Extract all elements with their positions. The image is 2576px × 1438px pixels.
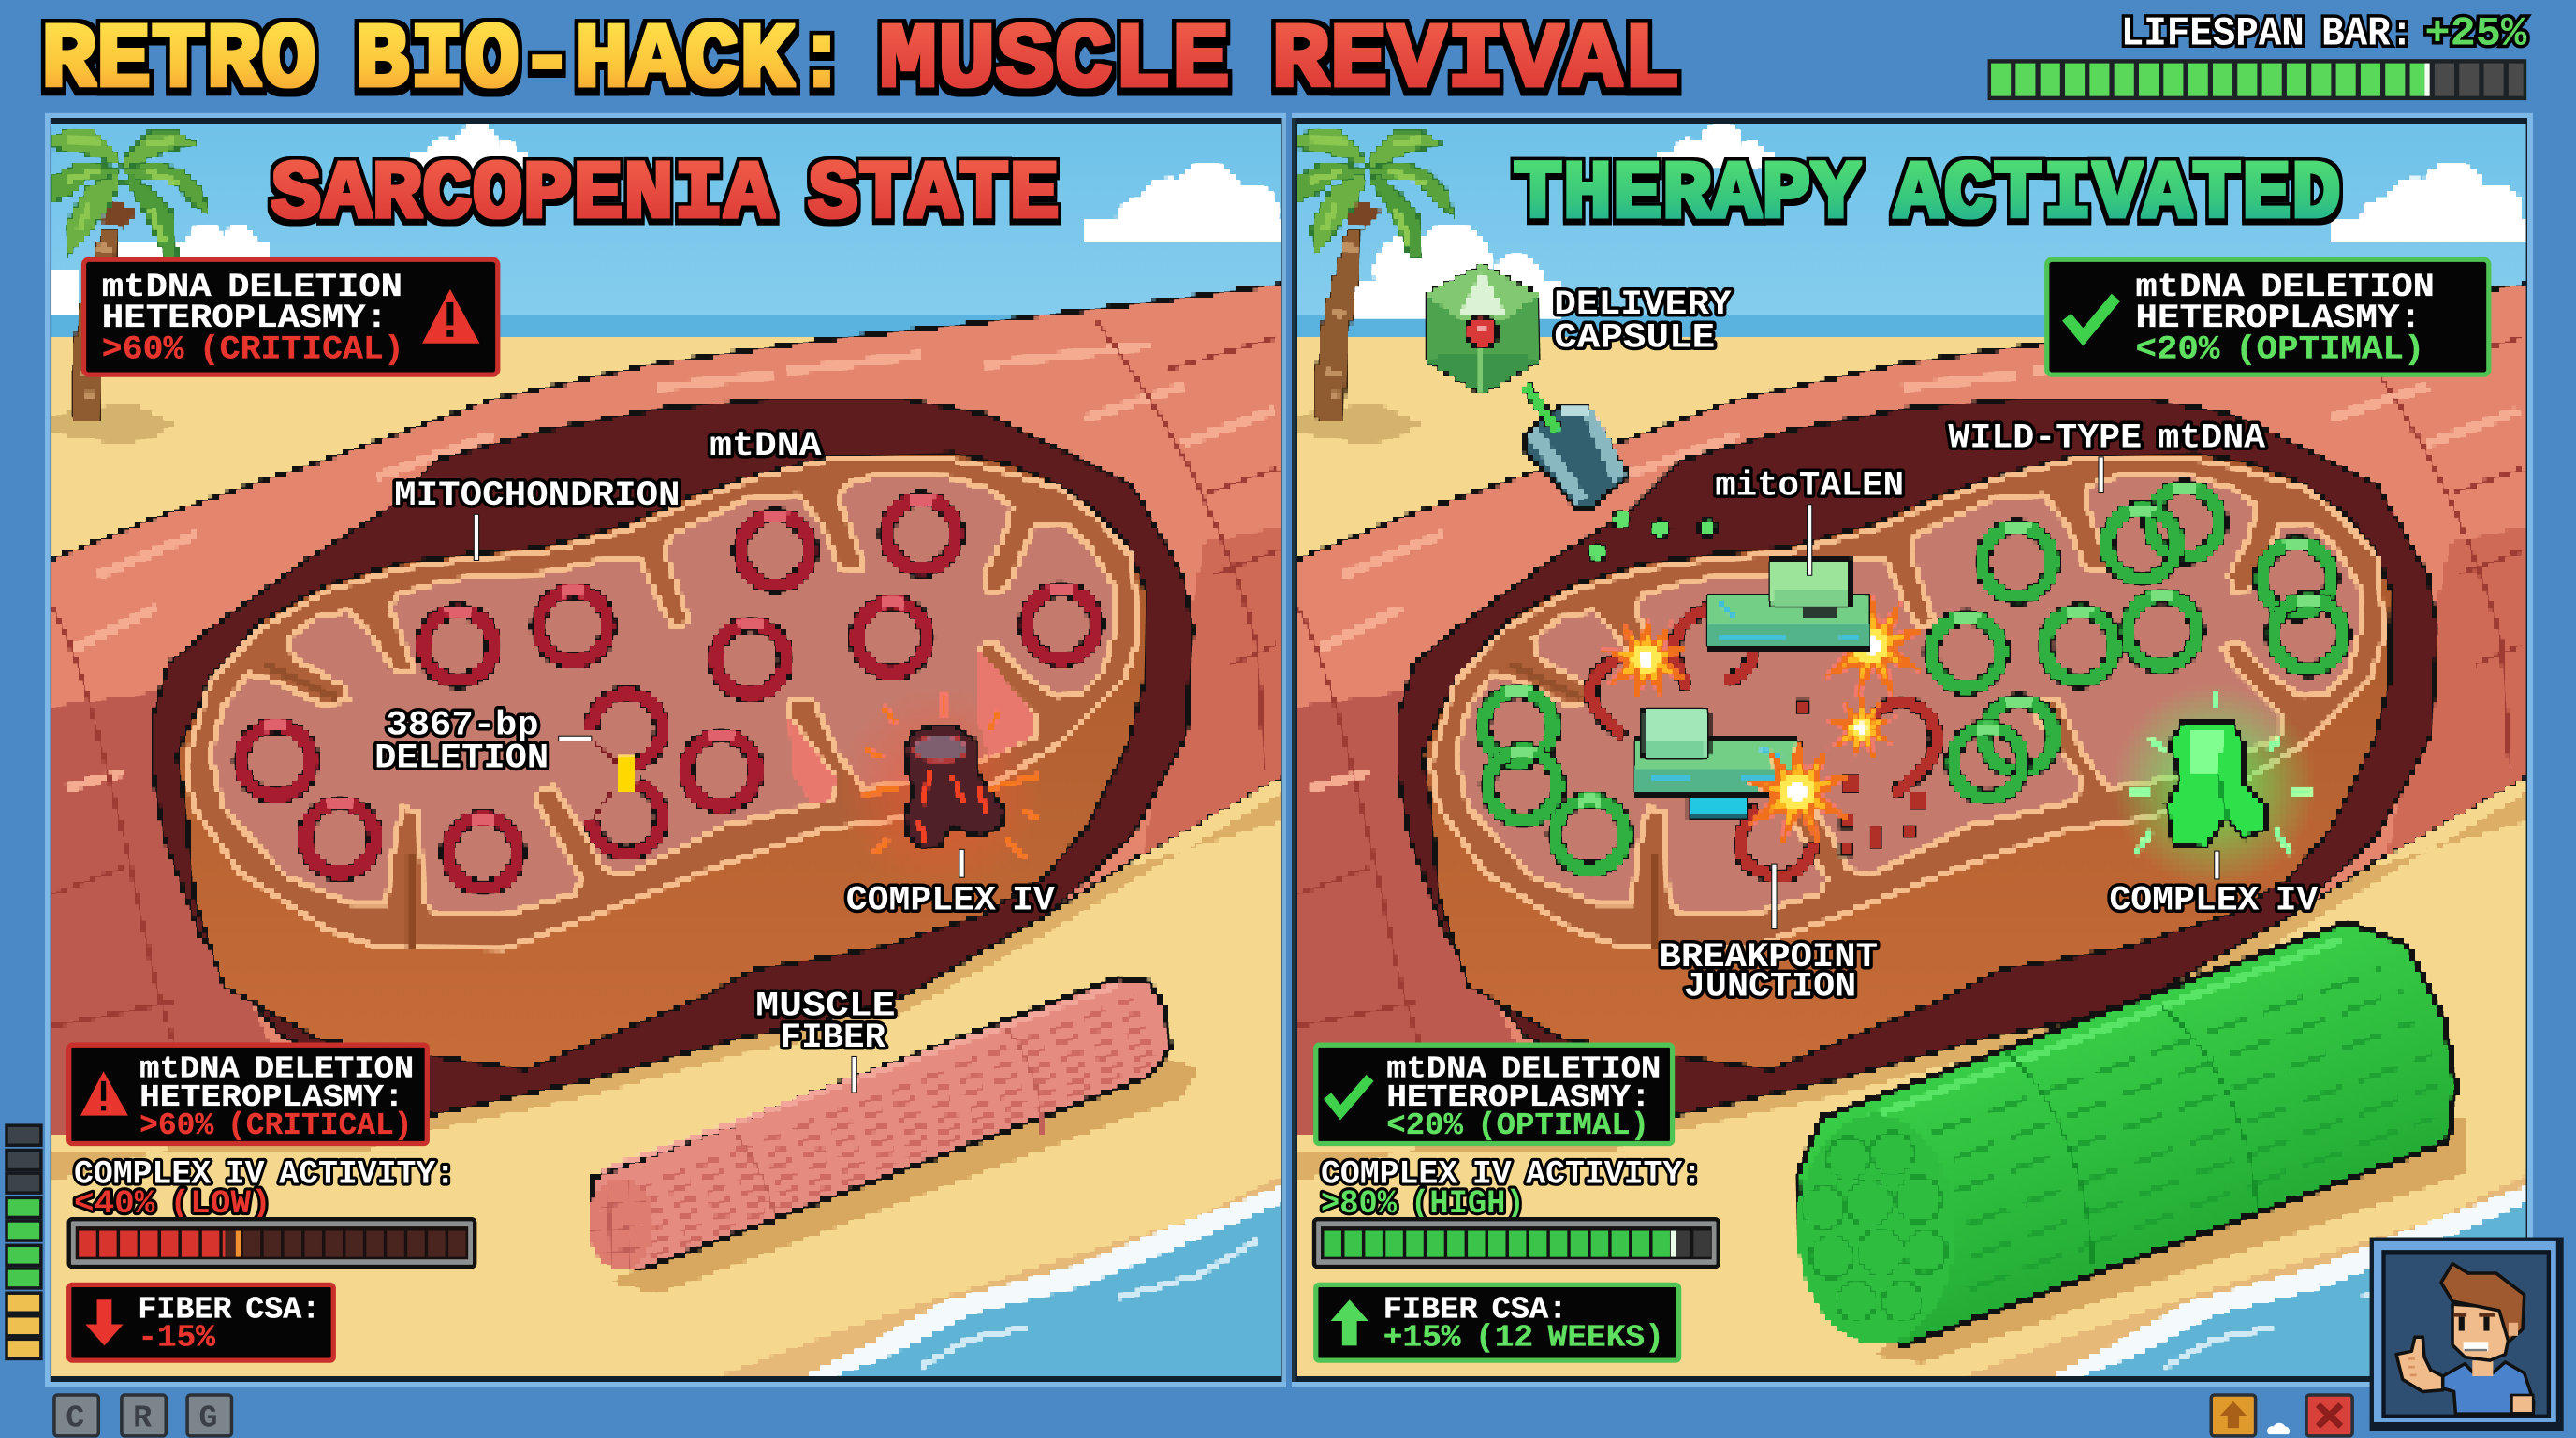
readout: complex IV activity high: COMPLEX IV ACTIVITY:	[1321, 1156, 1702, 1194]
readout: complex IV activity high	[1314, 1156, 1719, 1267]
icon: character ear, eyes and grin	[2453, 1313, 2518, 1351]
label: breakpoint junction	[1660, 864, 1878, 1007]
bottom left menu buttons: C	[66, 1401, 84, 1436]
label: mitoTALEN: mitoTALEN	[1715, 466, 1904, 506]
main title	[41, 8, 1680, 113]
readout: heteroplasmy optimal: mtDNA DELETION	[1386, 1051, 1661, 1087]
panel heading: sarcopenia state: SARCOPENIA STATE	[271, 150, 1060, 242]
bottom left menu buttons: G	[198, 1401, 217, 1436]
callout: heteroplasmy optimal	[2047, 259, 2489, 374]
delivery capsule	[1426, 265, 1540, 393]
readout: heteroplasmy optimal: <20% (OPTIMAL)	[1386, 1108, 1649, 1144]
label: muscle fiber: MUSCLE	[755, 988, 895, 1027]
callout: heteroplasmy optimal: mtDNA DELETION	[2135, 269, 2435, 306]
deleted mtDNA with breakpoint	[592, 694, 662, 853]
label: complex IV: COMPLEX IV	[846, 881, 1056, 920]
panel: sarcopenia state	[46, 115, 1286, 1388]
label: mitochondrion: MITOCHONDRION	[394, 477, 681, 516]
explosions	[1600, 590, 1927, 761]
readout: heteroplasmy critical: HETEROPLASMY:	[139, 1080, 404, 1116]
icon: character hair	[2441, 1264, 2525, 1342]
label: muscle fiber: FIBER	[781, 1019, 886, 1058]
readout: heteroplasmy optimal	[1316, 1045, 1673, 1144]
mitochondrion	[1398, 399, 2437, 1114]
lifespan bar	[1988, 59, 2526, 100]
main title: RETRO BIO-HACK:	[41, 8, 849, 113]
big muscle fiber regenerated	[1797, 922, 2464, 1364]
clouds	[1347, 124, 2526, 317]
label: breakpoint junction: JUNCTION	[1684, 968, 1856, 1007]
icon: character face	[2452, 1304, 2509, 1360]
palm tree	[52, 128, 209, 444]
muscle tissue band	[1295, 285, 2526, 1183]
bottom right buttons	[2211, 1395, 2352, 1436]
callout: heteroplasmy optimal: <20% (OPTIMAL)	[2135, 331, 2424, 369]
lifespan bar label: +25%	[2424, 10, 2527, 57]
readout: fiber CSA down: FIBER CSA:	[138, 1293, 320, 1328]
panel: therapy activated	[1291, 115, 2531, 1388]
character portrait	[2370, 1238, 2564, 1431]
label: 3867-bp deletion	[374, 706, 592, 779]
readout: complex IV activity low	[69, 1156, 475, 1267]
icon: thumbs up hand	[2396, 1337, 2443, 1391]
readout: fiber CSA up	[1316, 1284, 1679, 1360]
mitoTALEN lower	[1634, 708, 1799, 818]
label: delivery capsule: DELIVERY	[1554, 286, 1733, 325]
callout: heteroplasmy critical: >60% (CRITICAL)	[102, 331, 404, 369]
muscle tissue band	[50, 285, 1281, 1183]
label: mitochondrion	[394, 477, 681, 560]
icon: character shirt	[2443, 1362, 2534, 1414]
breakpoint explosion	[1741, 736, 1853, 845]
ocean shoreline	[707, 1175, 1281, 1382]
clouds	[51, 124, 1281, 315]
readout: fiber CSA up: +15% (12 WEEKS)	[1383, 1320, 1664, 1356]
readout: complex IV activity low: <40% (LOW)	[74, 1185, 271, 1223]
readout: fiber CSA down: -15%	[138, 1320, 216, 1356]
callout: heteroplasmy critical	[84, 259, 498, 374]
label: wild-type mtDNA: WILD-TYPE mtDNA	[1948, 418, 2266, 458]
readout: fiber CSA down	[69, 1284, 333, 1360]
callout: heteroplasmy optimal: HETEROPLASMY:	[2135, 300, 2422, 337]
readout: fiber CSA up: FIBER CSA:	[1383, 1293, 1567, 1328]
palm tree	[1297, 128, 1454, 444]
readout: heteroplasmy optimal: HETEROPLASMY:	[1386, 1080, 1651, 1116]
callout: heteroplasmy critical: HETEROPLASMY:	[102, 300, 388, 337]
readout: complex IV activity low: COMPLEX IV ACTIVITY:	[74, 1156, 455, 1194]
bottom left menu buttons	[54, 1395, 231, 1436]
syringe injector	[1524, 385, 1629, 508]
main title: MUSCLE REVIVAL	[879, 8, 1680, 113]
icon: lower hand	[2511, 1395, 2533, 1413]
cleaved mutant mtDNA fragments	[1591, 609, 1937, 875]
side status LEDs	[7, 1125, 41, 1358]
label: complex IV	[2109, 851, 2319, 920]
label: 3867-bp deletion: DELETION	[374, 740, 549, 779]
label: 3867-bp deletion: 3867-bp	[386, 706, 539, 745]
beach background	[1295, 122, 2526, 1388]
complex IV glow	[786, 652, 1033, 865]
label: wild-type mtDNA	[1948, 418, 2266, 492]
icon: character neck	[2472, 1360, 2493, 1376]
bottom left menu buttons: R	[133, 1401, 152, 1436]
lifespan bar label: LIFESPAN BAR:	[2121, 10, 2413, 57]
panel heading: therapy activated: THERAPY ACTIVATED	[1513, 150, 2341, 242]
label: mtDNA: mtDNA	[710, 427, 822, 466]
muscle fiber	[588, 977, 1199, 1295]
label: muscle fiber	[755, 988, 895, 1093]
readout: heteroplasmy critical	[69, 1045, 427, 1144]
nanoparticle dots	[1588, 510, 1717, 561]
wild-type mtDNA rings	[1483, 488, 2343, 870]
ocean shoreline	[1952, 1175, 2526, 1382]
label: mitoTALEN	[1715, 466, 1904, 575]
readout: heteroplasmy critical: mtDNA DELETION	[139, 1051, 414, 1087]
mitochondrion	[153, 399, 1193, 1114]
complex IV damaged	[862, 694, 1038, 858]
label: delivery capsule: CAPSULE	[1554, 318, 1715, 358]
mitoTALEN upper	[1706, 559, 1869, 649]
readout: complex IV activity high: >80% (HIGH)	[1321, 1185, 1525, 1223]
label: complex IV	[846, 849, 1056, 920]
beach background	[50, 122, 1281, 1388]
complex IV restored	[2113, 683, 2317, 888]
label: breakpoint junction: BREAKPOINT	[1660, 938, 1878, 977]
callout: heteroplasmy critical: mtDNA DELETION	[102, 269, 402, 306]
readout: heteroplasmy critical: >60% (CRITICAL)	[139, 1108, 413, 1144]
mtDNA rings	[241, 499, 1096, 888]
label: complex IV: COMPLEX IV	[2109, 881, 2319, 920]
label: delivery capsule	[1554, 286, 1733, 358]
